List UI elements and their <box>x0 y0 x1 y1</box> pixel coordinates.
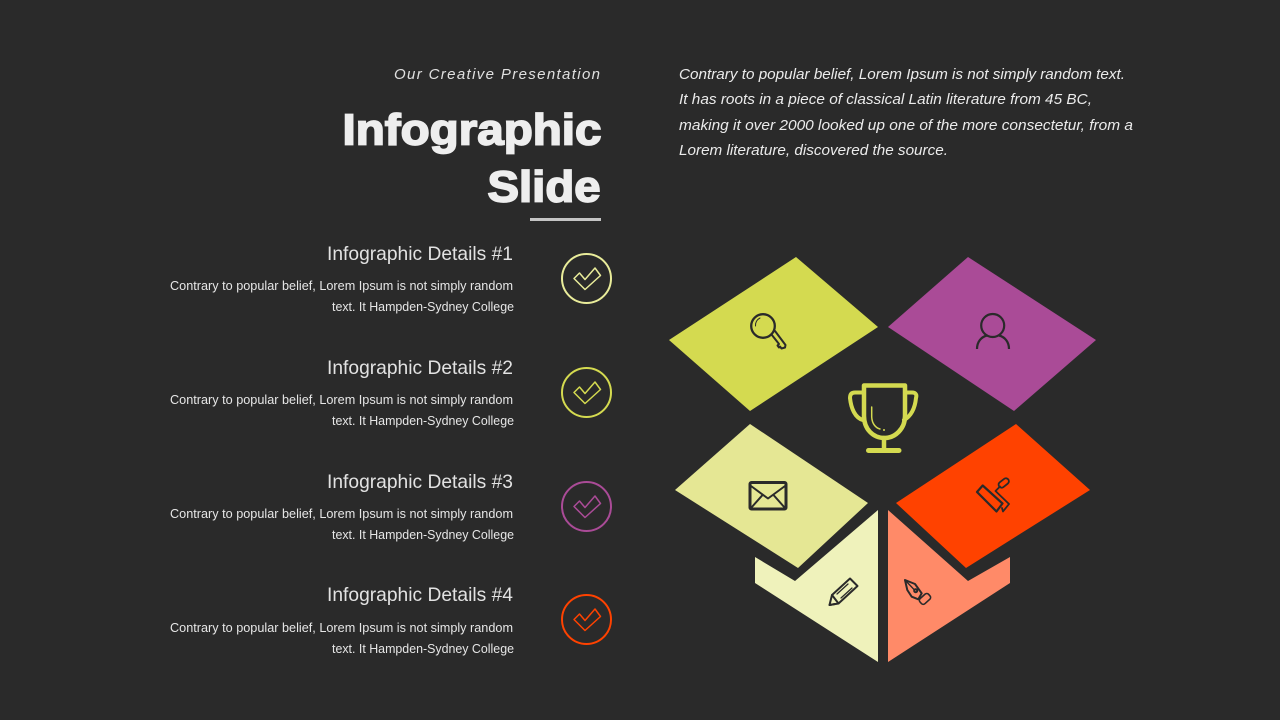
panel: pen side <box>888 510 1010 662</box>
icon: check badge 1 <box>562 254 611 303</box>
detail item 2 <box>170 357 611 428</box>
detail 4 text: Contrary to popular belief, Lorem Ipsum is not simply random <box>170 621 513 635</box>
panel: roller flap <box>896 424 1090 568</box>
title underline <box>530 218 601 221</box>
intro paragraph: making it over 2000 looked up one of the more consectetur, from a <box>679 117 1133 134</box>
panel: pencil side <box>755 510 878 662</box>
detail 3 heading: Infographic Details #3 <box>327 471 513 493</box>
detail 3 text: Contrary to popular belief, Lorem Ipsum is not simply random <box>170 507 513 521</box>
detail 2 text <box>170 393 514 428</box>
detail 4 heading: Infographic Details #4 <box>327 584 513 606</box>
detail 1 text: text. It Hampden-Sydney College <box>332 300 514 314</box>
detail item 4 <box>170 584 611 656</box>
subtitle: Our Creative Presentation <box>394 66 600 83</box>
intro paragraph: It has roots in a piece of classical Latin literature from 45 BC, <box>679 91 1092 108</box>
title <box>342 106 602 212</box>
panel: envelope flap <box>675 424 868 568</box>
detail item 3 <box>170 471 611 542</box>
icon: check badge 3 <box>562 482 611 531</box>
detail 3 text: text. It Hampden-Sydney College <box>332 528 514 542</box>
intro paragraph: Contrary to popular belief, Lorem Ipsum is not simply random text. <box>679 66 1125 83</box>
box diagram <box>669 257 1096 662</box>
icon: check badge 2 <box>562 368 611 417</box>
detail 1 text: Contrary to popular belief, Lorem Ipsum is not simply random <box>170 279 513 293</box>
detail 1 text <box>170 279 514 314</box>
intro paragraph: Lorem literature, discovered the source. <box>679 142 948 159</box>
icon: pencil <box>830 578 858 605</box>
icon: trophy <box>850 386 916 450</box>
intro paragraph <box>679 66 1133 159</box>
panel: person flap <box>888 257 1096 411</box>
detail 2 text: text. It Hampden-Sydney College <box>332 414 514 428</box>
detail 4 text <box>170 621 514 656</box>
icon: check badge 4 <box>562 595 611 644</box>
detail item 1 <box>170 243 611 314</box>
title: Slide <box>488 164 600 212</box>
icon: key <box>751 314 786 348</box>
detail 3 text <box>170 507 514 542</box>
icon: paint roller <box>977 477 1010 512</box>
detail 1 heading: Infographic Details #1 <box>327 243 513 265</box>
detail 2 text: Contrary to popular belief, Lorem Ipsum is not simply random <box>170 393 513 407</box>
panel: key flap <box>669 257 878 411</box>
icon: envelope <box>750 482 786 509</box>
icon: person <box>977 314 1009 349</box>
icon: fountain pen <box>905 580 932 605</box>
detail 2 heading: Infographic Details #2 <box>327 357 513 379</box>
detail 4 text: text. It Hampden-Sydney College <box>332 642 514 656</box>
title: Infographic <box>342 106 602 154</box>
